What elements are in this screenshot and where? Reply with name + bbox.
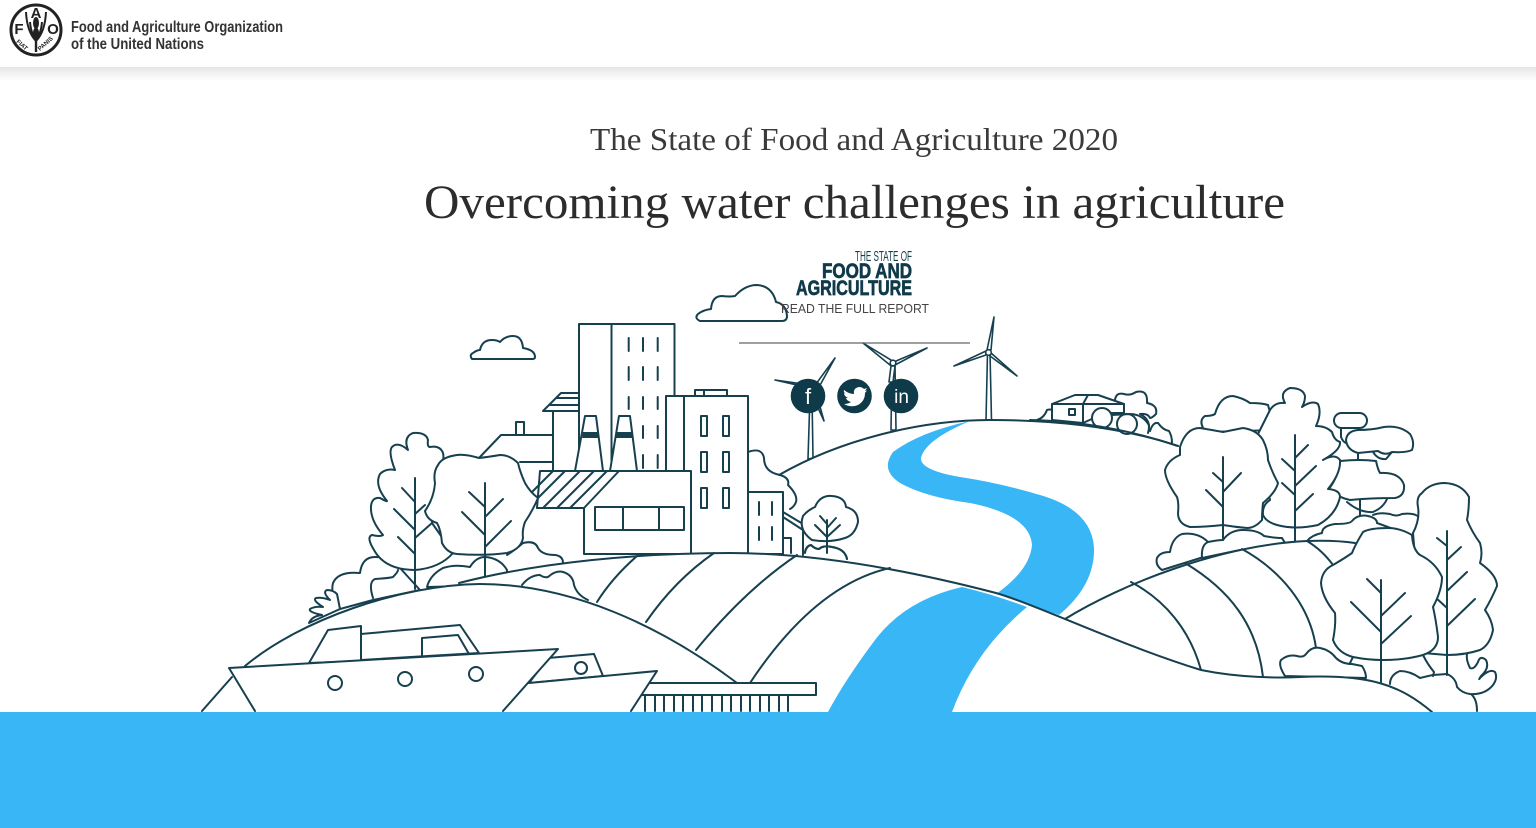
small building <box>748 492 813 555</box>
publication logo: THE STATE OF <box>855 248 912 265</box>
organization name: Food and Agriculture Organization <box>71 19 283 36</box>
stacked flat trees <box>1328 413 1413 515</box>
bushes and fern <box>1280 648 1496 711</box>
tree: round <box>425 455 538 577</box>
river lower section <box>828 587 1027 712</box>
far right trees <box>1280 483 1497 711</box>
tree: round right <box>1165 428 1278 552</box>
header bar <box>0 0 1536 81</box>
icon: FAO logo: O <box>47 21 59 38</box>
tree: tall oak <box>369 433 453 589</box>
right field hill <box>1065 541 1440 700</box>
river upper section <box>888 421 1094 615</box>
icon: FAO logo: PANIS <box>37 36 55 52</box>
office block <box>666 390 748 554</box>
rear boat <box>503 654 657 712</box>
tree: tall poplar <box>1413 483 1497 675</box>
icon: linkedin <box>884 379 918 413</box>
publication logo: FOOD AND <box>822 259 912 283</box>
icon: twitter <box>837 379 872 413</box>
bushes <box>309 542 563 623</box>
tree: tall oak right <box>1255 388 1340 542</box>
icon: facebook <box>791 379 825 413</box>
illustration: landscape <box>202 285 1497 712</box>
left trees and bushes <box>309 433 563 623</box>
title: The State of Food and Agriculture 2020 <box>590 121 1118 157</box>
small tree <box>802 496 858 559</box>
tall tower <box>579 324 674 474</box>
bushes on right field <box>1157 513 1421 570</box>
front left hill <box>245 572 737 712</box>
bush behind tree <box>1201 396 1275 432</box>
icon: clouds <box>471 285 787 359</box>
icon: facebook: f <box>805 384 812 409</box>
icon: FAO logo: A <box>31 5 42 22</box>
boats <box>202 625 657 712</box>
small house left <box>479 393 580 472</box>
publication logo: AGRICULTURE <box>796 276 912 300</box>
icon: FAO logo: FIAT <box>15 39 29 52</box>
icon: wind turbines <box>775 317 1017 459</box>
icon: FAO logo: F <box>14 21 24 38</box>
publication logo <box>796 248 912 300</box>
right trees and bushes <box>1157 388 1421 570</box>
bush behind small building <box>748 450 796 509</box>
back hill with farmhouse <box>779 391 1178 560</box>
front boat <box>202 625 558 712</box>
factory buildings <box>479 324 858 559</box>
organization name: of the United Nations <box>71 36 204 53</box>
main factory hall <box>527 471 691 554</box>
cooling towers <box>575 416 637 471</box>
subtitle heading: Overcoming water challenges in agriculture <box>424 176 1285 229</box>
read the full report link: READ THE FULL REPORT <box>781 302 929 316</box>
icon: linkedin: in <box>894 387 909 408</box>
water band <box>0 712 1536 828</box>
organization name <box>71 19 283 53</box>
tree: round front <box>1321 528 1442 682</box>
middle field hill <box>459 545 1432 712</box>
icon: FAO logo <box>11 5 61 55</box>
pier <box>630 683 816 711</box>
